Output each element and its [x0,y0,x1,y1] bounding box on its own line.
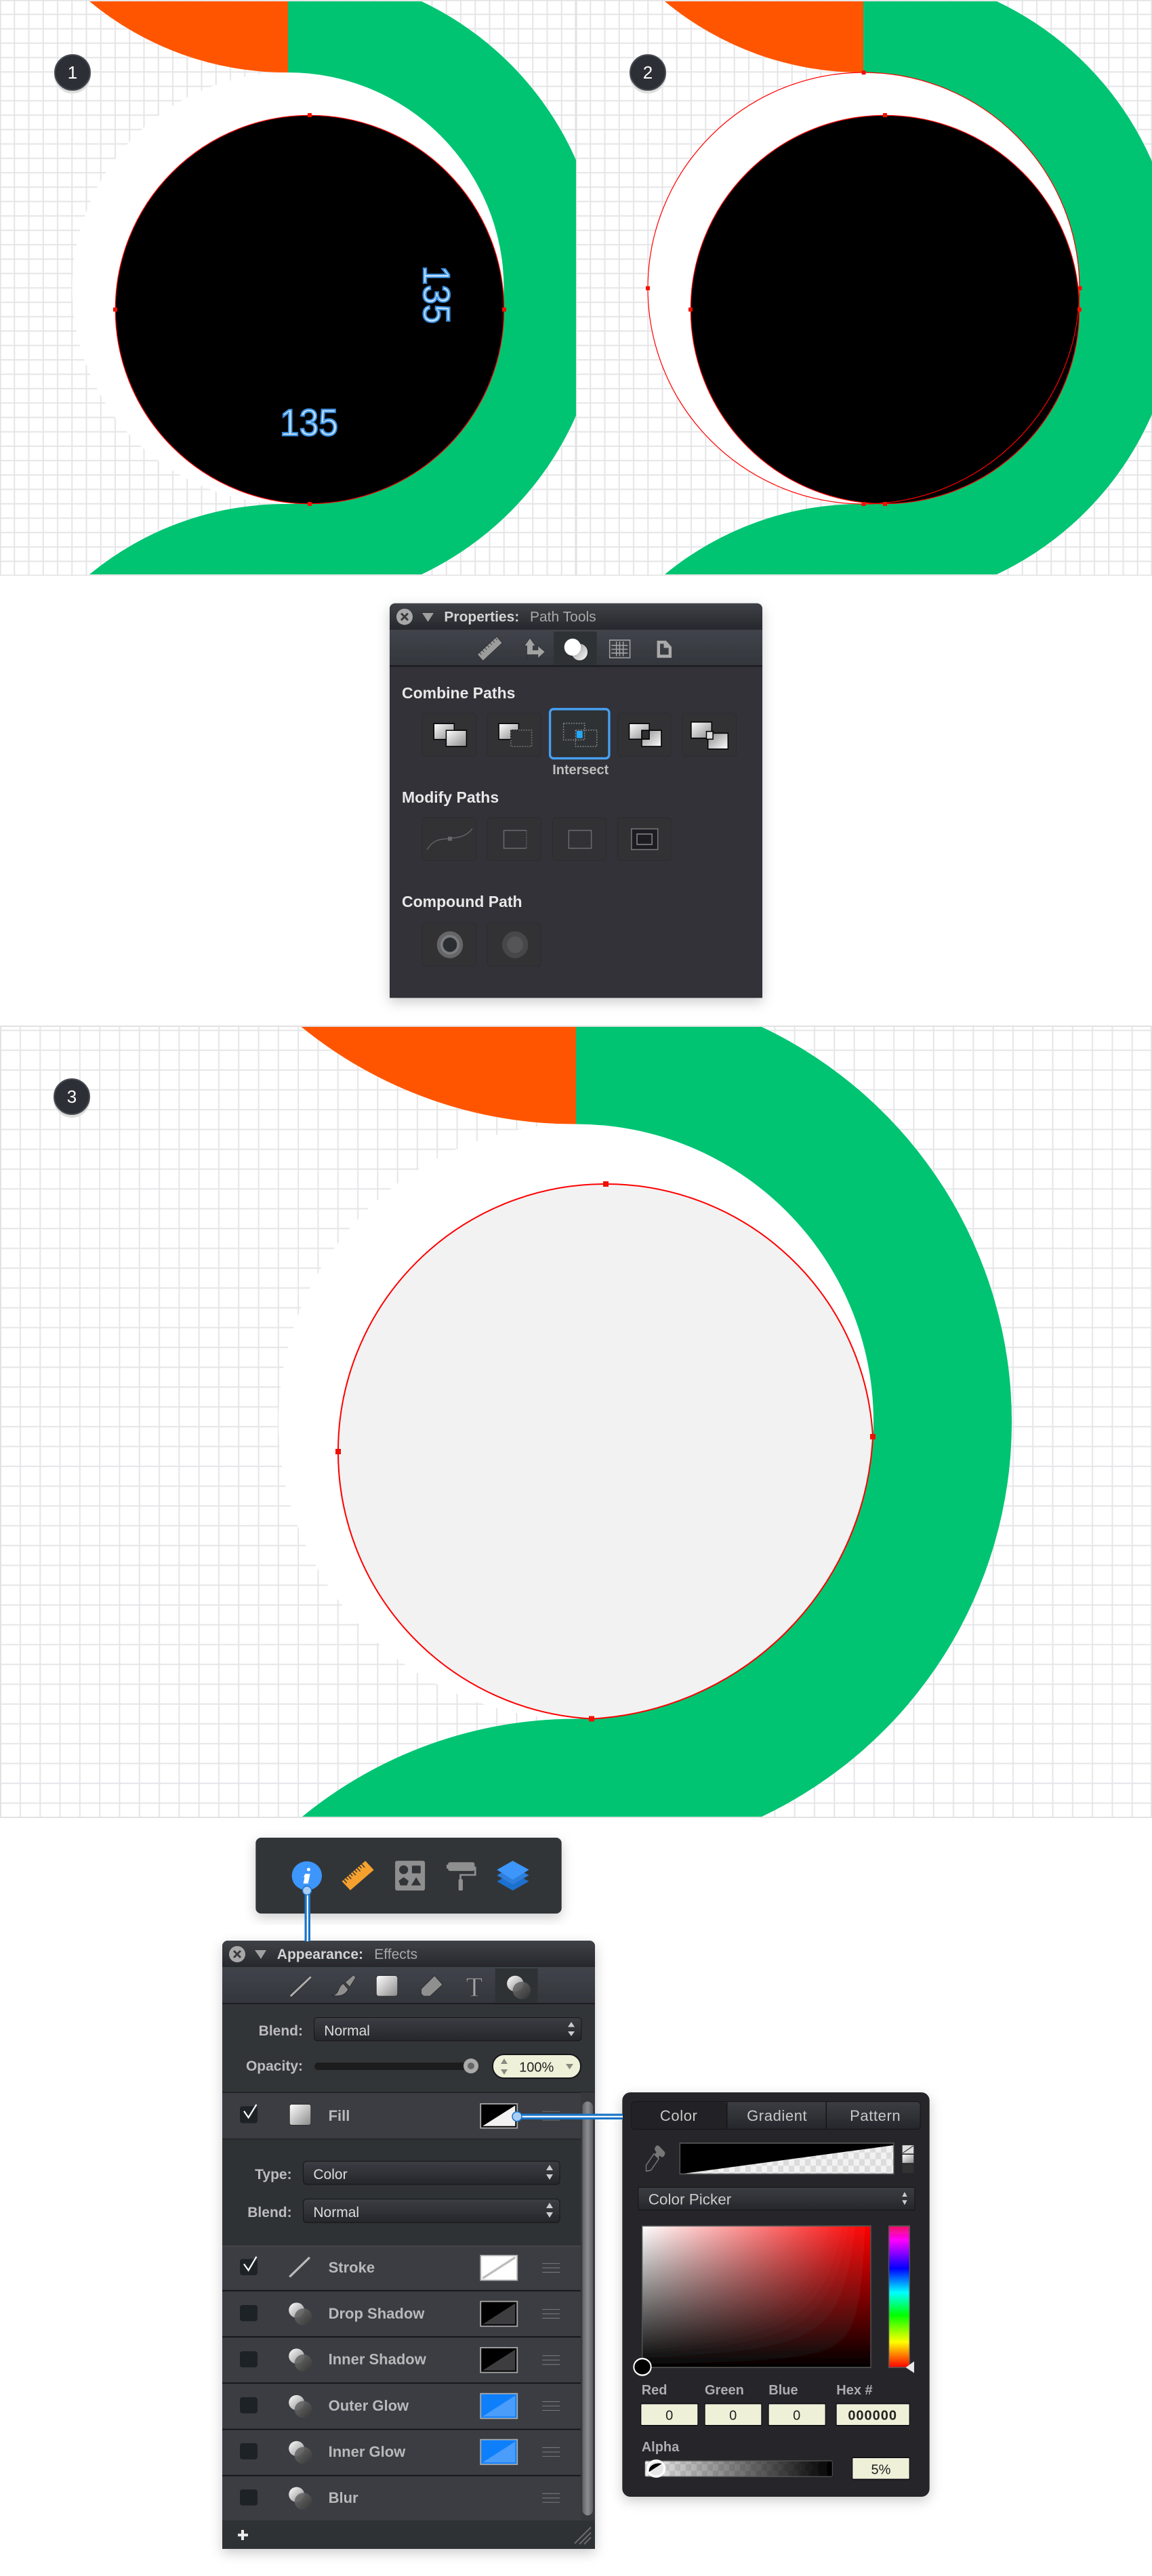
orange shape [89,1,288,72]
effects list: Inner Glow [329,2443,406,2460]
icon: line [291,1977,311,1996]
white circle [279,1124,873,1719]
icon: ruler [477,637,502,661]
value fields [641,2404,909,2479]
grid background [0,1026,1152,1818]
grey intersected shape [338,1184,873,1719]
toolbar: T [466,1972,482,2002]
color picker dropdown [638,2187,915,2210]
panel 1: black circle on shape [0,0,576,576]
picker background [622,2092,930,2497]
white circle [648,72,1079,504]
label: Intersect: Intersect [552,763,609,778]
panel: Properties Path Tools [390,604,762,998]
title bar: Path Tools [530,610,596,625]
anchor points [646,70,1082,506]
orange shape [665,1,863,72]
effects list: Blur [329,2489,358,2506]
alpha knob [646,2459,665,2478]
alpha slider [645,2461,832,2476]
icon: divide [691,722,728,749]
panel body [390,604,762,998]
dropdown arrows [902,2192,907,2205]
outer glow swatch [480,2394,517,2418]
icon: subtract [499,723,532,746]
icon: grid [610,640,630,658]
inner shadow swatch [480,2348,517,2373]
fill options: Color [313,2167,348,2182]
panel: Appearance Effects [222,1941,595,2549]
drop shadow swatch [480,2302,517,2326]
step badge 3: 3 [67,1086,77,1107]
icon: layers [497,1861,529,1891]
path tool buttons [422,709,737,966]
effects list: Outer Glow [329,2397,409,2414]
panel: color picker [622,2092,930,2497]
title bar [222,1941,595,1967]
saturation brightness field [642,2226,871,2367]
panel body [222,1941,595,2549]
tabs: Gradient [747,2107,807,2124]
icon: line highlight [291,1977,311,1996]
opacity row: 100% [519,2061,554,2075]
channel labels: Red [642,2383,667,2398]
orange shape [302,1027,576,1124]
icon: paint roller [447,1862,476,1891]
stroke swatch [480,2256,517,2280]
icon: unite [434,723,466,746]
tabs [632,2102,920,2129]
fill row [222,2092,595,2139]
title bar: Effects [374,1947,417,1962]
icon: rectangle [569,830,592,848]
grid background [0,0,576,576]
black circle [691,115,1079,504]
toolbar [222,1967,595,2004]
icon: ring [437,931,463,958]
title bar: Properties: [444,610,519,625]
anchor points [335,1181,876,1722]
channel labels: Alpha [642,2440,680,2455]
heading: Combine Paths: Combine Paths [402,684,515,702]
height label: 135 [415,266,458,324]
channel labels: Hex # [836,2383,873,2398]
green shape [665,1,1152,574]
toolbar background [255,1838,562,1914]
effect icons [289,2302,312,2510]
effects list: Inner Shadow [329,2351,427,2368]
icon: disc [502,931,528,958]
icon: info [292,1861,322,1891]
blend row: Blend: [259,2023,303,2039]
red outline circle [648,72,1079,504]
icon: combine circles [564,639,588,660]
channel values: 5% [871,2463,891,2478]
fill options [222,2139,581,2246]
channel labels: Green [705,2383,744,2398]
icon: shapes [395,1861,425,1891]
fill options: Type: [255,2167,292,2182]
black circle [115,115,504,504]
opacity row: Opacity: [246,2058,303,2074]
panel: icon toolbar [255,1838,562,1914]
channel values: 0 [793,2409,800,2424]
channel values: 0 [665,2409,673,2424]
checkboxes [240,2259,258,2506]
tabs: Color [660,2107,697,2124]
anchor points [113,113,506,506]
channel labels: Blue [768,2383,798,2398]
channel values [665,2409,897,2478]
icon: gradient square [376,1976,398,1996]
icon: exclude [630,723,661,746]
icon: rectangle open [504,830,527,848]
panel 2: circles overlapping [576,0,1152,576]
blend row [259,2018,581,2041]
channel values: 000000 [848,2409,897,2424]
title bar: Appearance: [277,1947,363,1962]
icon: effects [507,1976,531,1999]
icon: nested rectangle [632,829,658,849]
channel values: 0 [729,2409,737,2424]
heading: Modify Paths: Modify Paths [402,788,499,806]
title bar [390,604,762,630]
tabs: Pattern [850,2107,901,2124]
icon: brush [331,1975,356,1996]
connector: info icon to Appearance panel [302,1886,312,1941]
fill options: Normal [313,2205,359,2220]
current colour swatch [680,2143,894,2174]
heading: Compound Path: Compound Path [402,893,522,910]
icon: move arrows [524,638,545,659]
hue pointer [906,2361,914,2373]
grid background [576,0,1152,576]
icon: page [657,641,672,658]
scrollbar [581,2092,595,2520]
panel 3: resulting shape [0,1026,1152,1818]
footer with add button [222,2520,595,2549]
connector: fill swatch to color picker [512,2112,623,2121]
opacity row [246,2054,581,2078]
effects list [222,2245,581,2520]
white circle [72,72,504,504]
stroke check mark [244,2257,256,2271]
step badge 2 [630,55,666,93]
green shape [89,1,603,574]
icon: intersect selected [550,709,609,759]
width label: 135 [280,401,338,444]
icon: curve node [427,828,472,849]
fill options: Blend: [247,2205,292,2220]
reorder handles [542,2264,560,2502]
step badge 3 [54,1079,90,1118]
blend row: Normal [324,2023,370,2039]
effects list: Drop Shadow [329,2305,425,2322]
toolbar [390,630,762,667]
step badge 2: 2 [643,62,653,83]
colour knob [634,2359,651,2376]
fill row: Fill [329,2107,350,2124]
channel labels [642,2383,873,2455]
dropdown label: Color Picker [649,2191,732,2208]
inner glow swatch [480,2440,517,2464]
icon: eyedropper [642,2145,666,2176]
small swatches [903,2145,913,2173]
icon: ruler [342,1861,374,1891]
green shape [302,1027,1012,1817]
hue slider [889,2226,909,2367]
step badge 1 [54,55,91,93]
step badge 1: 1 [68,62,77,83]
effects list: Stroke [329,2259,375,2276]
stroke line icon [289,2258,310,2277]
icon: tag [421,1976,443,1996]
